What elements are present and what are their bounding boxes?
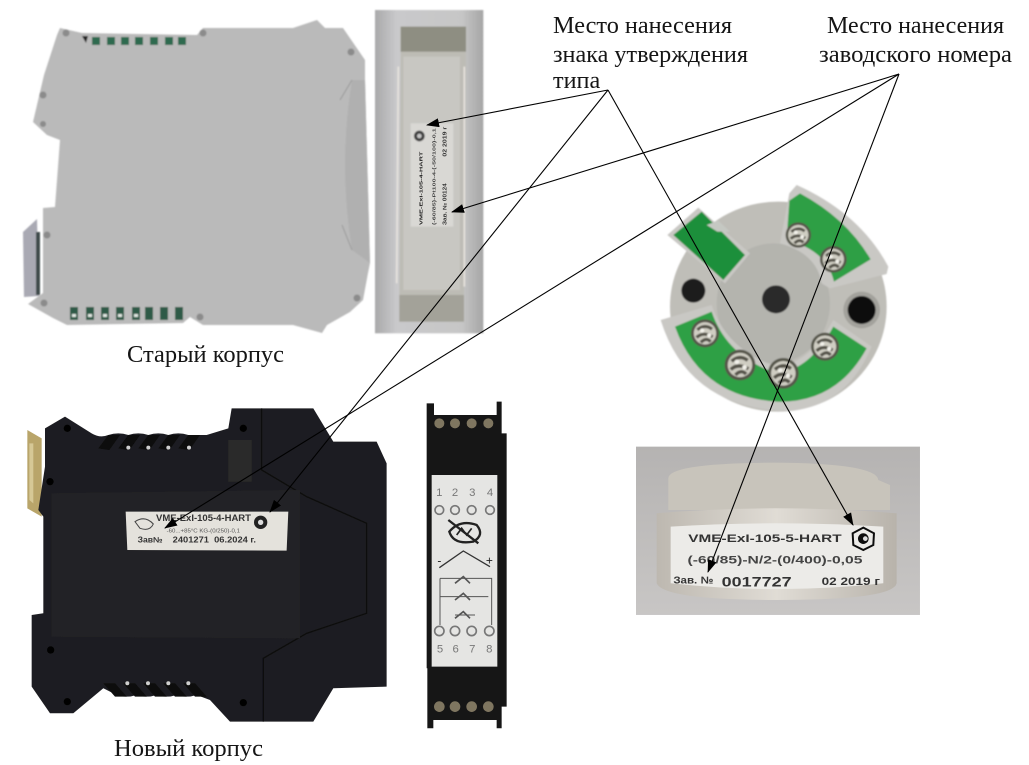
- terminal numbers: 1: [436, 487, 442, 499]
- logo and approval mark on plate: [135, 519, 153, 529]
- terminal numbers: 7: [469, 644, 475, 656]
- terminal numbers: 3: [469, 487, 475, 499]
- type label on old housing: [411, 123, 453, 227]
- photo: round head transmitter side view with label: 0017727: [722, 574, 792, 590]
- photo: old housing end view with label: (-60/85)-Pt100-4-(-50/100)-0,1: [431, 128, 436, 225]
- photo: old housing end view with label: Зав. № 00124: [443, 183, 449, 225]
- terminal numbers: 8: [486, 644, 492, 656]
- plate text: VME-ExI-105-4-HART: [156, 513, 252, 523]
- DIN rail clip: [27, 430, 42, 517]
- photo: new housing front view: [427, 402, 507, 728]
- photo: old housing end view with label: VME-ExI-105-4-HART: [419, 152, 425, 225]
- VM logo: [448, 520, 480, 543]
- housing rivets: [40, 30, 360, 320]
- heading: approval mark location: [553, 12, 748, 94]
- terminal numbers: 5: [437, 644, 443, 656]
- photo: round head transmitter side view with label: (-60/85)-N/2-(0/400)-0,05: [687, 554, 862, 566]
- bottom green terminal slots: [70, 307, 183, 320]
- black body: [427, 402, 507, 728]
- terminal screws: [691, 222, 847, 389]
- photo: new housing side view: 2401271 06.2024 г.: [173, 536, 256, 545]
- white label plate: [126, 512, 288, 551]
- heading: approval mark location: Место нанесения: [553, 12, 732, 39]
- photo: round head transmitter top view: [661, 185, 888, 412]
- photo: round head transmitter side view with label: Зав. №: [673, 575, 713, 586]
- terminal numbers: 4: [487, 487, 493, 499]
- top green terminal slots: [92, 37, 186, 45]
- DIN rail clip: [23, 219, 39, 297]
- top ventilation slots: [98, 435, 200, 450]
- photo: old housing end view with label: 02 2019 г: [443, 126, 449, 157]
- heading: approval mark location: знака утверждения: [553, 41, 748, 68]
- heading: serial number location: Место нанесения: [827, 12, 1004, 39]
- mounting holes: [681, 279, 705, 303]
- caption: new housing: Новый корпус: [114, 735, 263, 762]
- grey housing body: [28, 20, 370, 333]
- heading: serial number location: заводского номера: [819, 41, 1012, 68]
- photo: old housing end view with label: [375, 10, 483, 333]
- white panel: [432, 475, 497, 667]
- arrows: serial number: [165, 74, 899, 572]
- caption: old housing: Старый корпус: [127, 341, 284, 368]
- heading: serial number location: [819, 12, 1012, 68]
- black housing body: [32, 408, 387, 722]
- terminal numbers: 2: [452, 487, 458, 499]
- rivets: [46, 425, 247, 706]
- terminal numbers: -: [437, 553, 441, 567]
- photo: new housing side view: Зав№: [138, 536, 163, 545]
- terminal screws: [434, 418, 494, 712]
- photo: old housing side view: [23, 20, 370, 333]
- housing end: [399, 27, 466, 322]
- approval mark: [853, 528, 874, 550]
- disc body: [670, 202, 887, 412]
- top-right tab with green area: [780, 185, 888, 288]
- photo: new housing side view: -60...+85°C KG-(0/250)-0,1: [167, 529, 240, 535]
- top-left tab with green block: [667, 208, 750, 283]
- photo: round head transmitter side view with label: [636, 447, 920, 615]
- photo: new housing side view: [27, 408, 387, 722]
- lower green area: [661, 305, 872, 411]
- terminal numbers: [436, 487, 493, 656]
- label text: VME-ExI-105-5-HART: [688, 533, 842, 545]
- arrows: approval mark: [270, 90, 853, 525]
- terminal numbers: 6: [453, 644, 459, 656]
- bottom ventilation slots: [103, 683, 207, 697]
- terminal numbers: +: [486, 553, 493, 567]
- heading: approval mark location: типа: [553, 67, 600, 94]
- photo: round head transmitter side view with label: 02 2019 г: [822, 576, 880, 588]
- wiring diagram: [435, 506, 494, 636]
